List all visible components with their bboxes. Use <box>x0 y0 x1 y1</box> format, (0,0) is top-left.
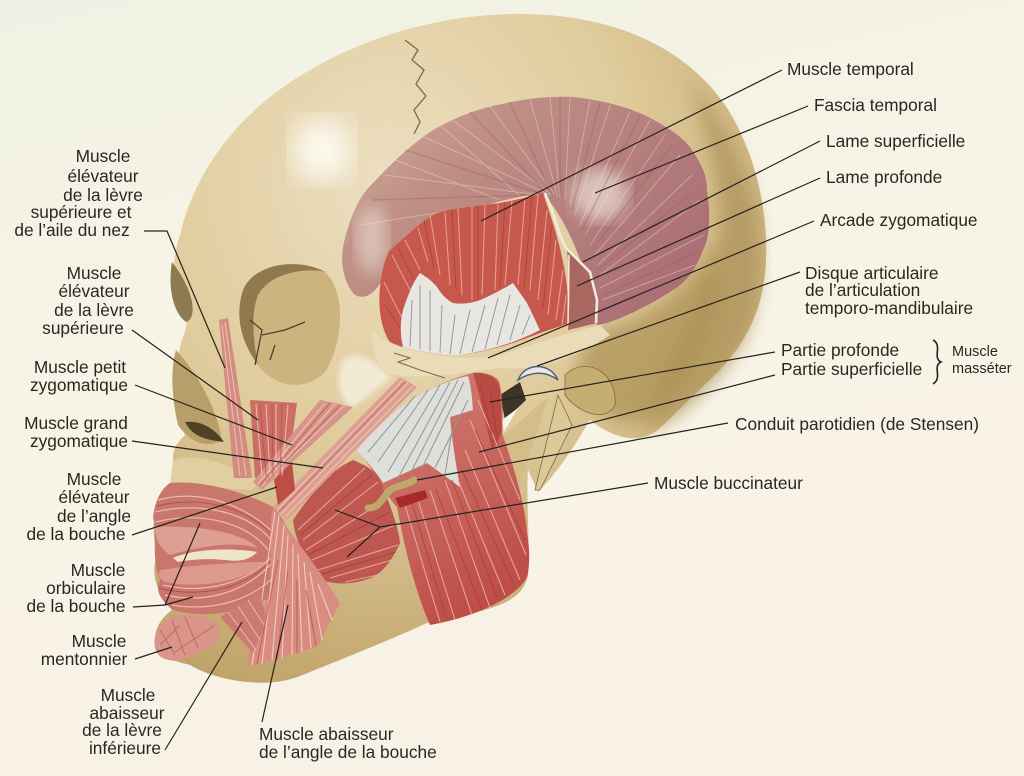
labels: left column: de l’aile du nez <box>14 220 130 240</box>
cheekbone highlight <box>339 356 392 408</box>
teeth <box>173 550 257 562</box>
temporal bone dark gap <box>500 382 526 420</box>
lame superficielle cut edge <box>545 193 597 323</box>
labels: left column: de la lèvre <box>82 720 162 740</box>
labels: left column: Muscle <box>67 263 121 283</box>
masseter tendon <box>357 376 473 487</box>
labels: left column: Muscle <box>72 631 126 651</box>
labels: left column: élévateur <box>58 487 130 507</box>
disque articulaire <box>518 366 558 380</box>
labels: left column: de l’angle <box>57 506 131 526</box>
labels: left column: supérieure et <box>31 202 132 222</box>
labels: right column: Muscle temporal <box>787 59 914 79</box>
deep lamina segment <box>567 250 597 330</box>
petit zygomatique <box>253 400 353 490</box>
labels: right column: temporo-mandibulaire <box>805 298 973 318</box>
labels: right column: de l’articulation <box>805 280 920 300</box>
labels: left column: supérieure <box>42 318 124 338</box>
labels: left column: Muscle <box>67 469 121 489</box>
labels: left column: zygomatique <box>30 431 128 451</box>
fascia fibres and white patch <box>572 169 628 221</box>
labels: right column: Partie superficielle <box>781 359 922 379</box>
labels: left column: Muscle <box>101 685 155 705</box>
labels: left column: de la lèvre <box>63 185 143 205</box>
nasal cavity <box>172 350 222 444</box>
grand zygomatique <box>273 377 417 520</box>
labels: left column: inférieure <box>89 738 161 758</box>
temporal fascia <box>342 97 709 325</box>
masseter deep part <box>473 373 502 450</box>
labels: right column: Disque articulaire <box>805 263 939 283</box>
depressor of lower lip <box>220 593 267 653</box>
leader lines <box>132 70 820 750</box>
labels: left column: Muscle petit <box>34 357 126 377</box>
labels: left column: de la lèvre <box>54 300 134 320</box>
rear skull shading <box>649 80 761 432</box>
labels: left column: Muscle grand <box>24 413 128 433</box>
labels: right column: Muscle <box>952 344 998 360</box>
lower cranium shading <box>576 240 719 423</box>
temporal tendon <box>401 273 540 355</box>
labels: left column: Muscle <box>71 560 125 580</box>
labels: bottom: de l’angle de la bouche <box>259 742 437 762</box>
labels: right column <box>654 59 1012 493</box>
labels: right column: masséter <box>952 361 1012 377</box>
labels: right column: Lame profonde <box>826 167 942 187</box>
muscle temporal <box>379 193 570 355</box>
skull bone <box>154 14 766 683</box>
levator labii superioris alaeque nasi <box>219 318 252 478</box>
parotid duct <box>368 480 414 508</box>
levator labii superioris <box>250 400 297 478</box>
labels: right column: Arcade zygomatique <box>820 210 978 230</box>
labels: left column: zygomatique <box>30 375 128 395</box>
maxilla bone <box>170 458 262 490</box>
brace: masseter <box>933 340 941 384</box>
buccinateur <box>293 460 400 583</box>
upper lip <box>155 527 258 555</box>
labels: right column: Muscle buccinateur <box>654 473 803 493</box>
labels: left column: orbiculaire <box>46 578 126 598</box>
illustration: skull with facial muscles <box>153 14 766 683</box>
levator anguli oris <box>274 462 295 505</box>
mastoid and styloid <box>565 366 615 415</box>
labels: right column: Lame superficielle <box>826 131 965 151</box>
labels: left column <box>14 146 165 758</box>
labels: left column: élévateur <box>58 281 130 301</box>
zygomatic arch <box>372 325 610 377</box>
labels: left column: de la bouche <box>27 596 125 616</box>
depressor anguli oris <box>247 507 340 667</box>
labels: left column: élévateur <box>67 166 139 186</box>
labels: right column: Conduit parotidien (de Stensen) <box>735 414 979 434</box>
labels: bottom <box>259 724 437 762</box>
labels: left column: mentonnier <box>41 649 127 669</box>
labels: bottom: Muscle abaisseur <box>259 724 394 744</box>
orbicularis of the mouth <box>153 482 294 614</box>
labels: right column: Partie profonde <box>781 340 899 360</box>
labels: left column: de la bouche <box>27 524 125 544</box>
nasal bone and eye orbit <box>171 262 193 322</box>
labels: left column: abaisseur <box>90 703 165 723</box>
red blood patch near duct <box>395 490 428 508</box>
lower lip <box>159 562 265 585</box>
labels: right column: Fascia temporal <box>814 95 937 115</box>
forehead highlight <box>292 118 352 182</box>
labels: left column: Muscle <box>76 146 130 166</box>
mandible ramus <box>503 398 548 512</box>
parotid notch <box>502 408 518 432</box>
coronal suture <box>405 40 426 134</box>
masseter <box>357 373 529 625</box>
mentalis <box>154 615 220 661</box>
